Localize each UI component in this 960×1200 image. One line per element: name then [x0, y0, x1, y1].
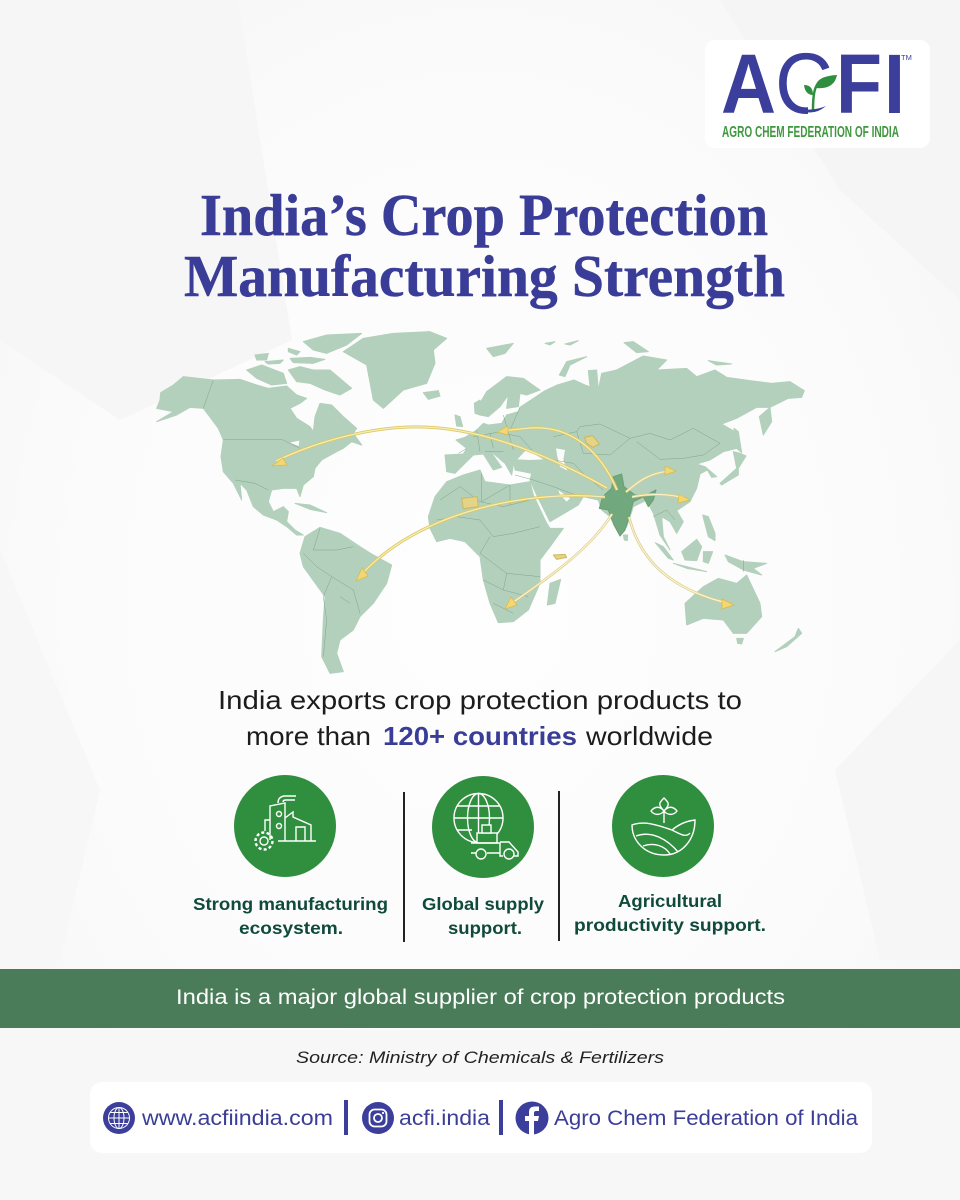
arrow: India to USA	[272, 427, 607, 488]
logo: ACFI: C	[775, 36, 833, 132]
banner	[0, 969, 960, 1028]
panel: supply	[422, 776, 544, 938]
icon: factory and gear	[234, 775, 336, 877]
map: Eurasia, Africa and Oceania	[428, 341, 804, 652]
label: agriculture: Agricultural	[618, 891, 722, 911]
map: India highlighted	[599, 474, 656, 536]
panel: agriculture	[574, 775, 766, 935]
export statement: 120+ countries	[383, 721, 577, 751]
world map	[157, 332, 804, 673]
export statement: India exports crop protection products to	[218, 685, 742, 715]
icon: instagram	[362, 1102, 394, 1134]
logo sprout	[795, 75, 837, 114]
website: www.acfiindia.com	[141, 1107, 333, 1130]
icon: website globe	[103, 1102, 135, 1134]
logo: ACFI: A	[721, 37, 776, 131]
map: highlighted gold spots	[462, 436, 599, 559]
logo: ACFI	[705, 36, 930, 148]
banner: India is a major global supplier of crop protection products	[176, 985, 785, 1009]
logo: ACFI: F	[836, 37, 882, 131]
instagram handle: acfi.india	[399, 1107, 490, 1130]
export statement: more than	[246, 721, 371, 751]
source line: Source: Ministry of Chemicals & Fertilizers	[296, 1048, 665, 1067]
label: agriculture: productivity support.	[574, 915, 766, 935]
label: supply	[422, 894, 544, 938]
panel: manufacturing	[193, 775, 388, 938]
label: manufacturing: Strong manufacturing	[193, 894, 388, 914]
title: Manufacturing Strength	[184, 243, 785, 309]
arrow: India to Europe	[497, 426, 617, 490]
arrow: India to South Africa	[505, 514, 612, 609]
icon: facebook	[516, 1102, 548, 1134]
title	[184, 182, 785, 309]
arrow: India to Australia	[629, 517, 734, 609]
label: supply: support.	[448, 918, 522, 938]
title: India’s Crop Protection	[200, 182, 768, 248]
export statement	[218, 685, 742, 751]
arrow: India to China south	[632, 494, 690, 503]
logo: ACFI: I	[884, 37, 905, 131]
label: agriculture	[574, 891, 766, 935]
label: manufacturing	[193, 894, 388, 938]
logo: ACFI: TM	[901, 53, 912, 62]
contact bar	[90, 1082, 872, 1153]
export statement: worldwide	[585, 721, 713, 751]
facebook name: Agro Chem Federation of India	[554, 1107, 858, 1130]
icon: field and seedling	[612, 775, 714, 877]
label: supply: Global supply	[422, 894, 544, 914]
label: manufacturing: ecosystem.	[239, 918, 343, 938]
icon: globe and truck	[432, 776, 534, 878]
arrow: India to Brazil	[356, 496, 605, 581]
map: Americas and Greenland	[157, 332, 480, 673]
arrow: India to China north	[626, 466, 676, 492]
